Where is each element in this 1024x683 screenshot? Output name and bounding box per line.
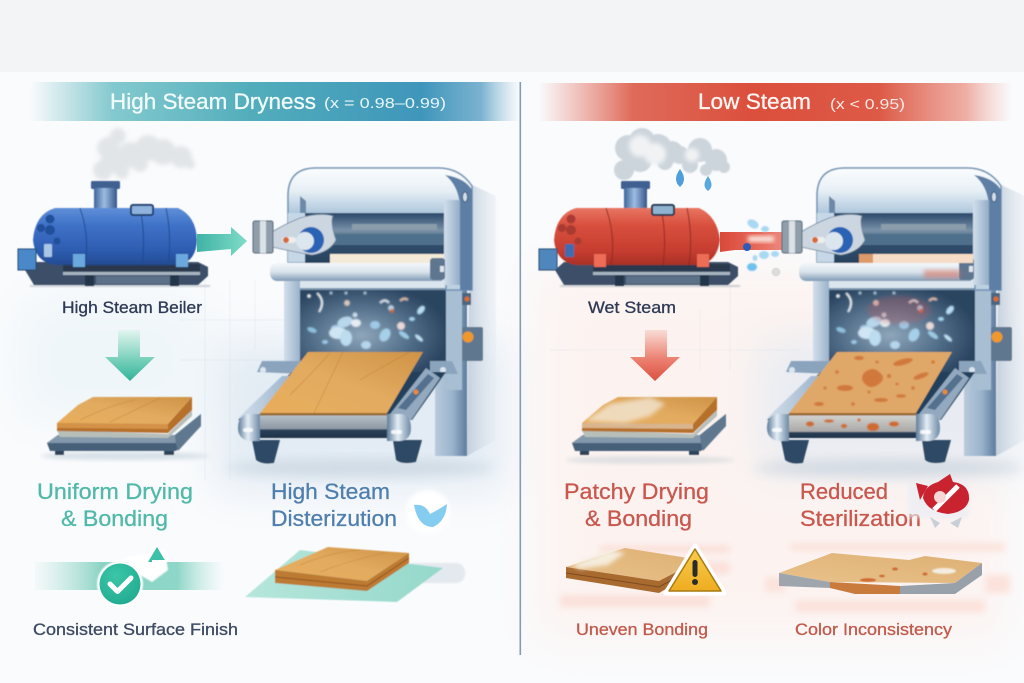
icon: drying machine wet (754, 168, 1024, 477)
heading: uniform drying and bonding: Uniform Drying (37, 479, 193, 504)
heading: high steam disterizution: Disterizution (271, 506, 397, 531)
panel: high steam dryness (18, 82, 520, 639)
heading: reduced sterilization: Reduced (800, 479, 888, 504)
center divider line (520, 82, 521, 655)
arrow: wet steam down to board (630, 330, 680, 381)
steam cloud left (93, 128, 195, 180)
title: low steam: Low Steam (698, 89, 811, 114)
label: wet steam: Wet Steam (588, 299, 676, 317)
wood board (260, 352, 423, 416)
heading: high steam disterizution (271, 479, 397, 531)
label: color inconsistency: Color Inconsistency (795, 621, 953, 639)
heading: uniform drying and bonding: & Bonding (61, 506, 168, 531)
icon: press with patchy wood (565, 397, 735, 464)
background wash: right panel (535, 270, 1020, 640)
conveyor belt (260, 415, 387, 438)
arrow: wet steam with droplets (720, 218, 785, 276)
icon: uneven board with warning (560, 545, 730, 607)
heading: high steam disterizution: High Steam (271, 479, 390, 504)
icon: press with wood (40, 397, 210, 460)
heading: uniform drying and bonding (37, 479, 193, 531)
icon: blue boiler (18, 181, 210, 287)
wet steam cloud with drops (614, 128, 730, 191)
background wash: left panel (20, 300, 505, 490)
icon: blue bird badge (406, 490, 450, 534)
panel: low steam (538, 83, 1024, 639)
stains under hood (859, 254, 973, 324)
heading: patchy drying and bonding: & Bonding (585, 506, 692, 531)
header band left (30, 82, 520, 121)
icon: crossed sterilization (908, 474, 969, 528)
icon: finished board on mat (245, 547, 465, 602)
icon: drying machine (225, 168, 496, 477)
stained conveyor belt (789, 415, 916, 438)
damaged wood board (789, 352, 952, 431)
arrow: boiler down to board (105, 330, 155, 381)
header band right (538, 83, 1013, 121)
heading: patchy drying and bonding (564, 479, 709, 531)
heading: patchy drying and bonding: Patchy Drying (564, 479, 709, 504)
title: high steam dryness: High Steam Dryness (110, 89, 316, 114)
icon: red boiler (539, 181, 740, 287)
subtitle: dryness range: (x = 0.98–0.99) (324, 96, 446, 112)
label: boiler: High Steam Beiler (62, 299, 203, 317)
label: consistent surface finish: Consistent Surface Finish (33, 621, 238, 639)
icon: check on strip (35, 547, 225, 607)
label: uneven bonding: Uneven Bonding (576, 621, 708, 639)
subtitle: low dryness range: (x < 0.95) (830, 97, 905, 113)
arrow: boiler to press (197, 227, 247, 256)
heading: reduced sterilization (800, 479, 921, 531)
icon: color inconsistent board (765, 543, 1010, 612)
heading: reduced sterilization: Sterilization (800, 506, 921, 531)
